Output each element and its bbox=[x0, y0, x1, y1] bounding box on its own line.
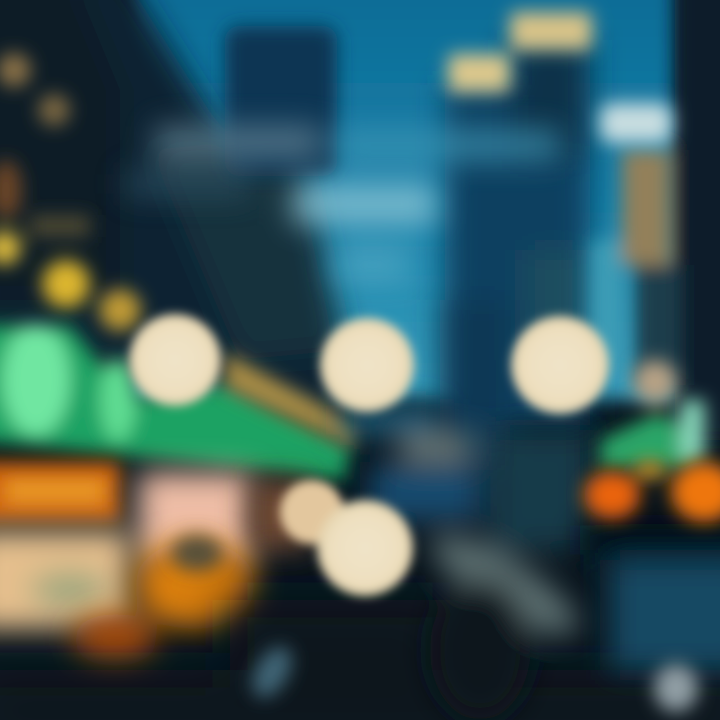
building: centre right towers bbox=[440, 40, 590, 470]
circle marker 5 bbox=[317, 500, 413, 596]
circle marker 3 bbox=[511, 316, 609, 414]
cream circles bbox=[129, 314, 609, 596]
building: upper centre tower bbox=[225, 26, 337, 176]
right green awning bbox=[600, 360, 705, 468]
circle marker 1 bbox=[129, 314, 221, 406]
centre street haze bbox=[340, 405, 591, 720]
right street bbox=[580, 525, 720, 670]
circle marker 2 bbox=[320, 318, 414, 412]
circle marker 4 bbox=[280, 480, 344, 544]
sky bbox=[130, 0, 680, 400]
building tops bbox=[448, 12, 672, 143]
building: far right bbox=[592, 0, 720, 440]
road bbox=[0, 600, 720, 720]
road reflections bbox=[244, 640, 698, 712]
pink shop bbox=[138, 472, 253, 567]
taxi window bbox=[171, 535, 223, 571]
hazy window bands bbox=[125, 126, 560, 282]
shop glow bbox=[0, 480, 310, 630]
street lights bbox=[0, 53, 141, 331]
gold awning edge bbox=[225, 352, 358, 448]
right orange lights bbox=[584, 461, 720, 522]
orange taxi bbox=[73, 541, 255, 666]
building: upper left mass bbox=[0, 0, 345, 430]
green awning left bbox=[0, 324, 350, 480]
orange sign bbox=[0, 462, 120, 522]
